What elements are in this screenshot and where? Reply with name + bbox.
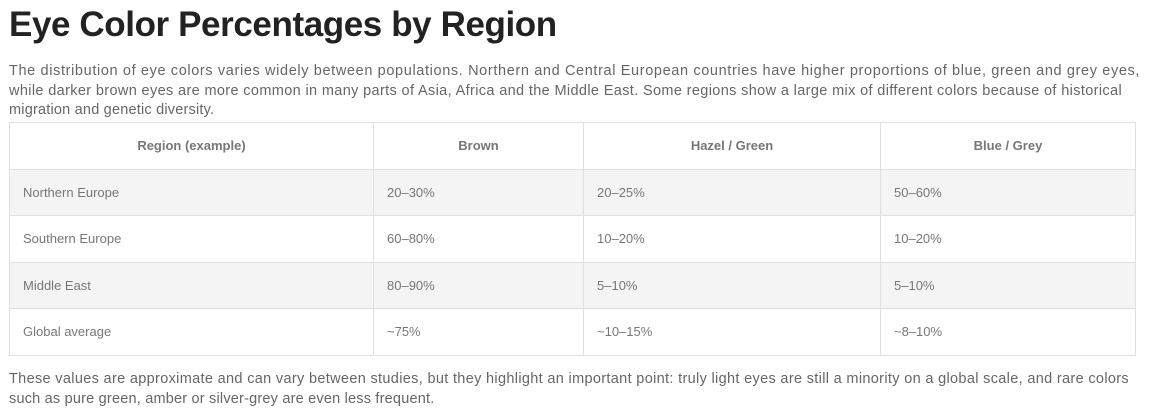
table: eye color percentages: 60–80% bbox=[387, 231, 435, 246]
table: eye color percentages: 10–20% bbox=[894, 231, 942, 246]
table: eye color percentages: 5–10% bbox=[597, 278, 637, 293]
table: eye color percentages: ~8–10% bbox=[894, 324, 942, 339]
table: eye color percentages: 5–10% bbox=[894, 278, 934, 293]
table: eye color percentages: Hazel / Green bbox=[691, 138, 773, 153]
footer note: such as pure green, amber or silver-grey are even less frequent. bbox=[9, 390, 434, 406]
table: eye color percentages: Middle East bbox=[23, 278, 91, 293]
table: eye color percentages: Region (example) bbox=[137, 138, 246, 153]
footer note: These values are approximate and can vary between studies, but they highlight an important point: truly light eyes are still a minority on a global scale, and rare colors bbox=[9, 371, 1129, 387]
table: eye color percentages: Blue / Grey bbox=[974, 138, 1042, 153]
table: eye color percentages bbox=[9, 122, 1136, 356]
table: eye color percentages: 20–30% bbox=[387, 185, 435, 200]
footer note bbox=[9, 371, 1129, 406]
intro text: while darker brown eyes are more common in many parts of Asia, Africa and the Middle East. Some regions show a large mix of different colors because of historical bbox=[9, 82, 1122, 98]
title: Eye Color Percentages by Region bbox=[9, 5, 557, 44]
table: eye color percentages: 80–90% bbox=[387, 278, 435, 293]
intro text: migration and genetic diversity. bbox=[9, 102, 214, 118]
table: eye color percentages: Northern Europe bbox=[23, 185, 119, 200]
table: eye color percentages: Southern Europe bbox=[23, 231, 121, 246]
table: eye color percentages: Brown bbox=[458, 138, 499, 153]
table: eye color percentages: 50–60% bbox=[894, 185, 942, 200]
intro text bbox=[9, 63, 1140, 118]
table: eye color percentages: 20–25% bbox=[597, 185, 645, 200]
table: eye color percentages: 10–20% bbox=[597, 231, 645, 246]
table: eye color percentages: ~10–15% bbox=[597, 324, 652, 339]
table: eye color percentages: Global average bbox=[23, 324, 111, 339]
table: eye color percentages: ~75% bbox=[387, 324, 421, 339]
intro text: The distribution of eye colors varies widely between populations. Northern and Central European countries have higher proportions of blue, green and grey eyes, bbox=[9, 63, 1140, 79]
